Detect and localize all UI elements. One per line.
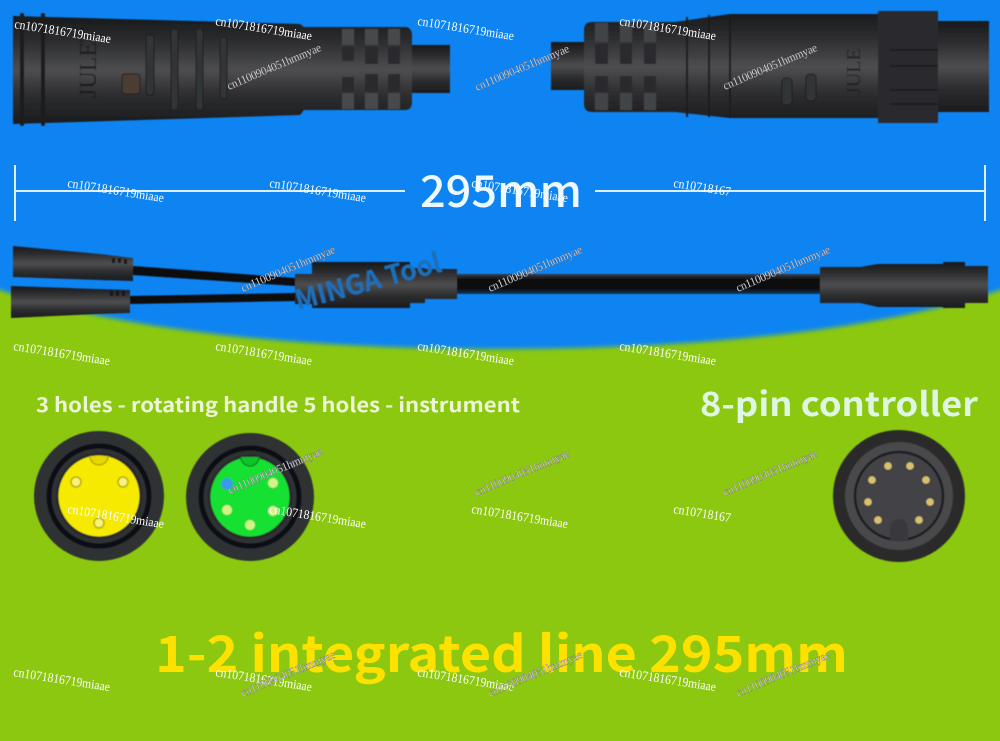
- left connector close-up: [13, 13, 450, 126]
- watermarks: store id: cn1071816719miaae: [215, 665, 314, 694]
- right connector close-up: [551, 11, 989, 123]
- left connector close-up: JULET: [76, 27, 102, 98]
- watermarks: store id: cn1071816719miaae: [13, 339, 112, 368]
- watermarks: store id: cn1071816719miaae: [67, 176, 166, 205]
- watermarks: store id: cn1071816719miaae: [14, 17, 113, 46]
- full cable assembly: [11, 241, 988, 318]
- watermarks: store id: cn1071816719miaae: [215, 339, 314, 368]
- watermarks: dotted store id: cn1100904051hmmyae: [486, 648, 584, 700]
- watermarks: store id: cn1071816719miaae: [619, 339, 718, 368]
- watermarks: store id: cn10718167: [673, 502, 732, 525]
- watermarks: store id: cn1071816719miaae: [417, 665, 516, 694]
- watermarks: dotted store id: cn1100904051hmmyae: [721, 447, 819, 499]
- right connector close-up: JULE: [843, 48, 865, 95]
- round connector: 5 holes green: [186, 433, 314, 561]
- watermarks: dotted store id: cn1100904051hmmyae: [721, 41, 819, 93]
- dimension line: [15, 165, 985, 221]
- dimension label: 295mm: 295mm: [420, 156, 582, 220]
- watermarks: dotted store id: cn1100904051hmmyae: [734, 648, 832, 700]
- watermarks: dotted store id: cn1100904051hmmyae: [225, 41, 323, 93]
- watermarks: store id: cn1071816719miaae: [417, 14, 516, 43]
- watermarks: dotted store id: cn1100904051hmmyae: [239, 243, 337, 295]
- main title: 1-2 integrated line 295mm: [155, 615, 848, 687]
- round connector: 3 holes yellow: [34, 431, 164, 561]
- watermarks: store id: cn1071816719miaae: [215, 14, 314, 43]
- watermarks: dotted store id: [225, 41, 832, 700]
- background: blue curved band: [0, 0, 1000, 349]
- watermarks: dotted store id: cn1100904051hmmyae: [734, 243, 832, 295]
- watermarks: store id: cn1071816719miaae: [471, 176, 570, 205]
- watermarks: store id: cn1071816719miaae: [619, 14, 718, 43]
- watermarks: dotted store id: cn1100904051hmmyae: [226, 445, 324, 497]
- watermarks: dotted store id: cn1100904051hmmyae: [486, 243, 584, 295]
- watermarks: store id: cn1071816719miaae: [471, 502, 570, 531]
- watermarks: dotted store id: cn1100904051hmmyae: [239, 648, 337, 700]
- round connector: 8-pin controller: [833, 430, 965, 562]
- watermarks: store id: cn1071816719miaae: [619, 665, 718, 694]
- watermarks: store id: [13, 14, 732, 694]
- watermarks: store id: cn1071816719miaae: [417, 339, 516, 368]
- watermarks: store id: cn1071816719miaae: [13, 665, 112, 694]
- brand overlay: MINGA Tool: MINGA Tool: [290, 241, 445, 318]
- connector captions: holes: 3 holes - rotating handle 5 holes - instrument: [36, 389, 521, 418]
- watermarks: store id: cn1071816719miaae: [269, 176, 368, 205]
- watermarks: dotted store id: cn1100904051hmmyae: [473, 447, 571, 499]
- watermarks: store id: cn10718167: [673, 176, 732, 199]
- watermarks: store id: cn1071816719miaae: [269, 502, 368, 531]
- connector caption: 8-pin controller: 8-pin controller: [700, 378, 979, 426]
- watermarks: store id: cn1071816719miaae: [67, 502, 166, 531]
- watermarks: dotted store id: cn1100904051hmmyae: [473, 42, 571, 94]
